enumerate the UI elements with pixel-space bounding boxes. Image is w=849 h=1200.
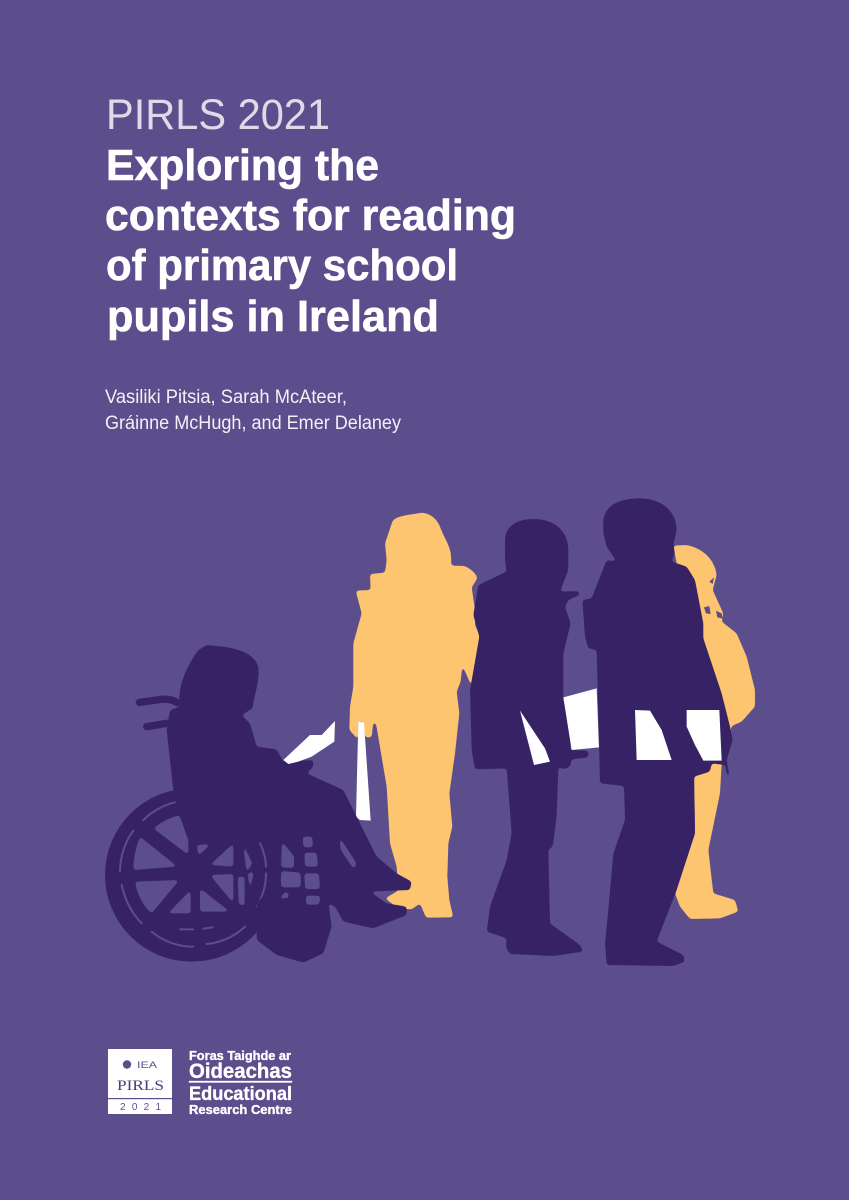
report title: contexts for reading <box>105 191 516 240</box>
authors <box>105 387 401 434</box>
report series heading: PIRLS 2021 <box>106 91 330 139</box>
logo: IEA PIRLS 2021 <box>108 1049 172 1114</box>
wheel <box>105 788 278 962</box>
logo: Educational Research Centre: Oideachas <box>189 1060 292 1083</box>
girl body, legs and chair frame <box>167 645 412 963</box>
logo: IEA PIRLS 2021: PIRLS <box>117 1078 164 1094</box>
silhouette: tall boy with book, dark <box>582 498 733 966</box>
silhouette: girl standing, yellow <box>349 513 480 918</box>
logo: IEA PIRLS 2021: IEA <box>137 1060 157 1070</box>
logo: Educational Research Centre: Research Centre <box>189 1103 292 1117</box>
open book <box>283 721 335 764</box>
chair handles <box>139 699 177 727</box>
title block <box>105 91 516 341</box>
logo: Educational Research Centre: Foras Taighde ar <box>189 1049 291 1063</box>
illustration: silhouettes of pupils <box>105 498 755 966</box>
report title: Exploring the <box>106 141 379 190</box>
silhouette: child behind, yellow <box>673 545 755 919</box>
chair frame gaps <box>278 837 357 905</box>
logo: Educational Research Centre <box>189 1049 292 1117</box>
icon: IEA globe <box>123 1060 131 1069</box>
silhouette: boy with book, dark <box>470 519 599 956</box>
report title <box>105 141 516 341</box>
report title: pupils in Ireland <box>107 292 439 341</box>
logo: IEA PIRLS 2021: 2021 <box>120 1102 161 1113</box>
logo: Educational Research Centre: Educational <box>189 1084 292 1105</box>
authors: Vasiliki Pitsia, Sarah McAteer, <box>105 387 347 408</box>
silhouette: girl in wheelchair reading <box>105 645 412 963</box>
authors: Gráinne McHugh, and Emer Delaney <box>105 413 401 434</box>
report title: of primary school <box>106 241 458 290</box>
